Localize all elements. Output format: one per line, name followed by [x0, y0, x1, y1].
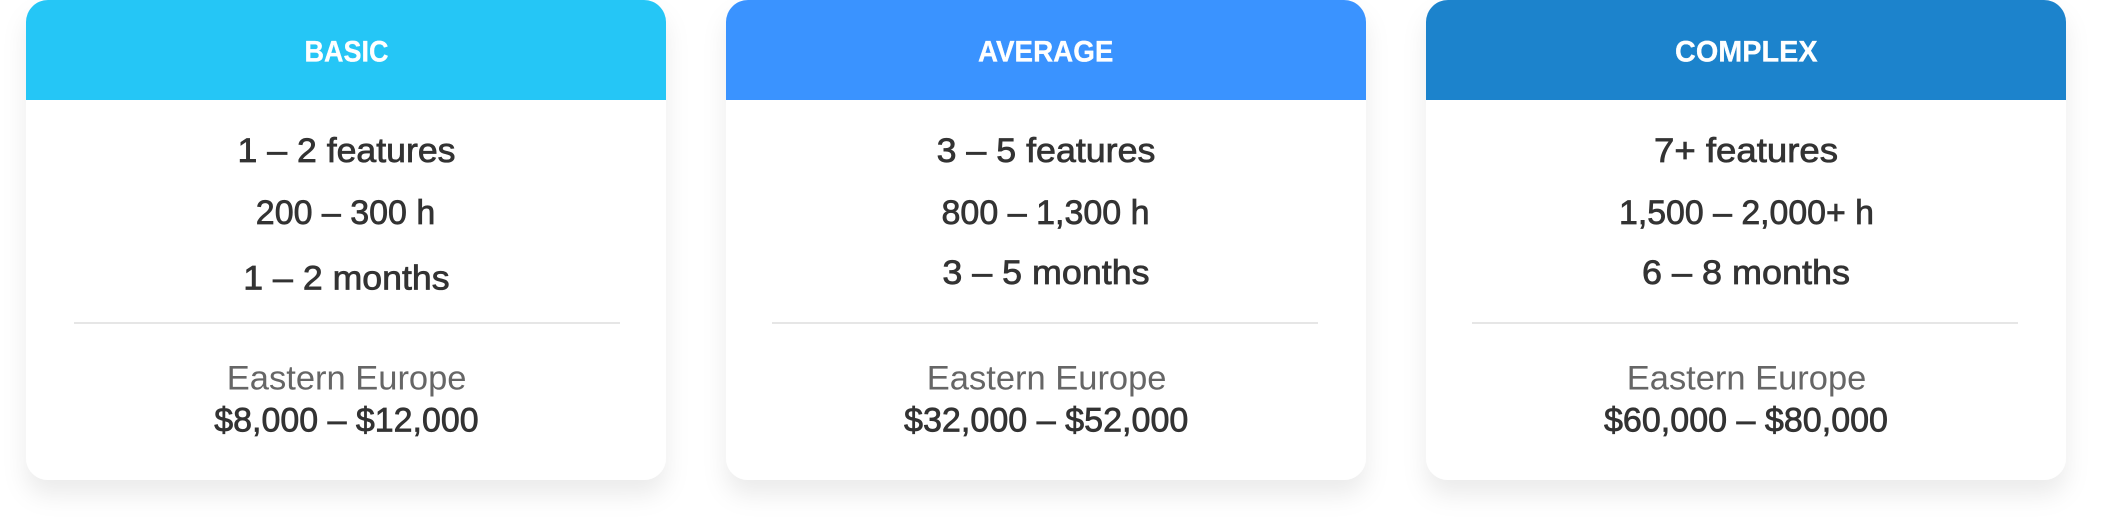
heading: basic: BASIC	[304, 36, 388, 69]
heading: average: AVERAGE	[978, 36, 1113, 69]
card background	[1426, 0, 2066, 480]
price: $32,000 – $52,000	[904, 402, 1188, 440]
hours: 200 – 300 h	[256, 194, 435, 232]
panel: complex	[1426, 0, 2066, 480]
panel: average	[726, 0, 1366, 480]
duration: 3 – 5 months	[942, 254, 1150, 292]
region label: Eastern Europe	[227, 360, 466, 398]
duration: 6 – 8 months	[1642, 254, 1850, 292]
features: 7+ features	[1654, 132, 1838, 170]
hours: 800 – 1,300 h	[942, 194, 1150, 232]
card background	[26, 0, 666, 480]
header band: basic	[26, 0, 666, 100]
features: 1 – 2 features	[238, 132, 456, 170]
header band: complex	[1426, 0, 2066, 100]
card background	[726, 0, 1366, 480]
heading: complex: COMPLEX	[1675, 36, 1818, 69]
hours: 1,500 – 2,000+ h	[1619, 194, 1874, 232]
price: $60,000 – $80,000	[1604, 402, 1888, 440]
features: 3 – 5 features	[937, 132, 1155, 170]
duration: 1 – 2 months	[243, 260, 450, 298]
region label: Eastern Europe	[927, 360, 1166, 398]
header band: average	[726, 0, 1366, 100]
panel: basic	[26, 0, 666, 480]
price: $8,000 – $12,000	[214, 402, 479, 440]
region label: Eastern Europe	[1627, 360, 1866, 398]
